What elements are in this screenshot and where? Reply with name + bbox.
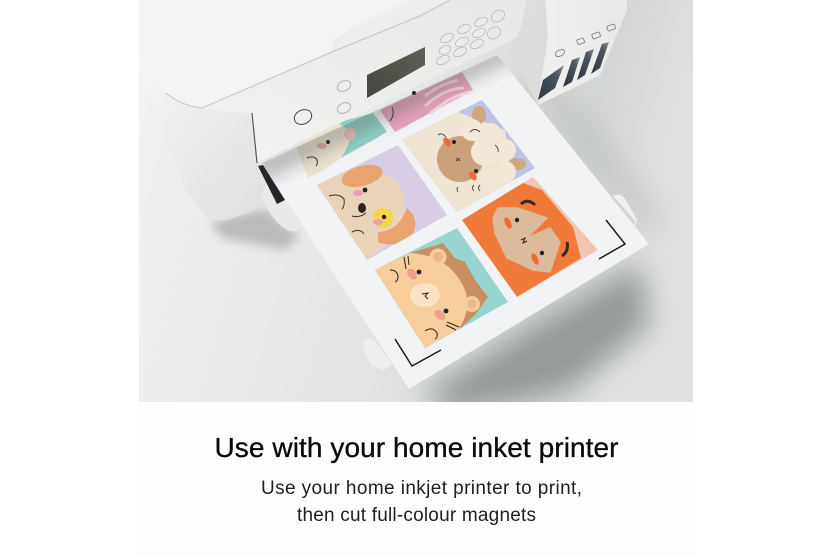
ink windows: [538, 65, 564, 100]
printer left body: [201, 124, 339, 220]
paper tab left: [363, 339, 392, 370]
caption block: [214, 432, 618, 526]
lower white panel tint: [139, 402, 693, 555]
heading: Use with your home inket printer: [214, 432, 618, 463]
paper tray: [258, 165, 303, 231]
body text: then cut full-colour magnets: [297, 505, 536, 526]
crop mark right: [599, 220, 625, 259]
tile: pink top: [380, 72, 473, 132]
LCD screen: [367, 47, 425, 98]
printer shadow: [210, 208, 300, 250]
tile: dog: [317, 145, 447, 260]
tank labels: [554, 49, 565, 57]
crop mark left: [395, 339, 441, 366]
paper sheet: [250, 30, 649, 389]
photo: printer with printed magnet sheet: [139, 0, 693, 415]
tile: teal top-left: [340, 113, 387, 158]
tile: fox: [462, 177, 598, 297]
body text: [261, 478, 582, 526]
tile: sheep: [400, 98, 540, 214]
printer lid and control panel: [139, 0, 527, 163]
tile: hedgehog: [370, 225, 510, 350]
infographic canvas: [139, 0, 693, 525]
body text: Use your home inkjet printer to print,: [261, 478, 582, 499]
body seam: [252, 113, 257, 163]
paper shadow from printer: [262, 55, 510, 184]
paper cast shadow: [425, 262, 650, 415]
power button: [294, 109, 312, 125]
keypad: [435, 7, 507, 67]
home and back buttons: [336, 80, 352, 114]
ink tank unit: [524, 0, 627, 105]
paper tab right: [613, 195, 637, 229]
